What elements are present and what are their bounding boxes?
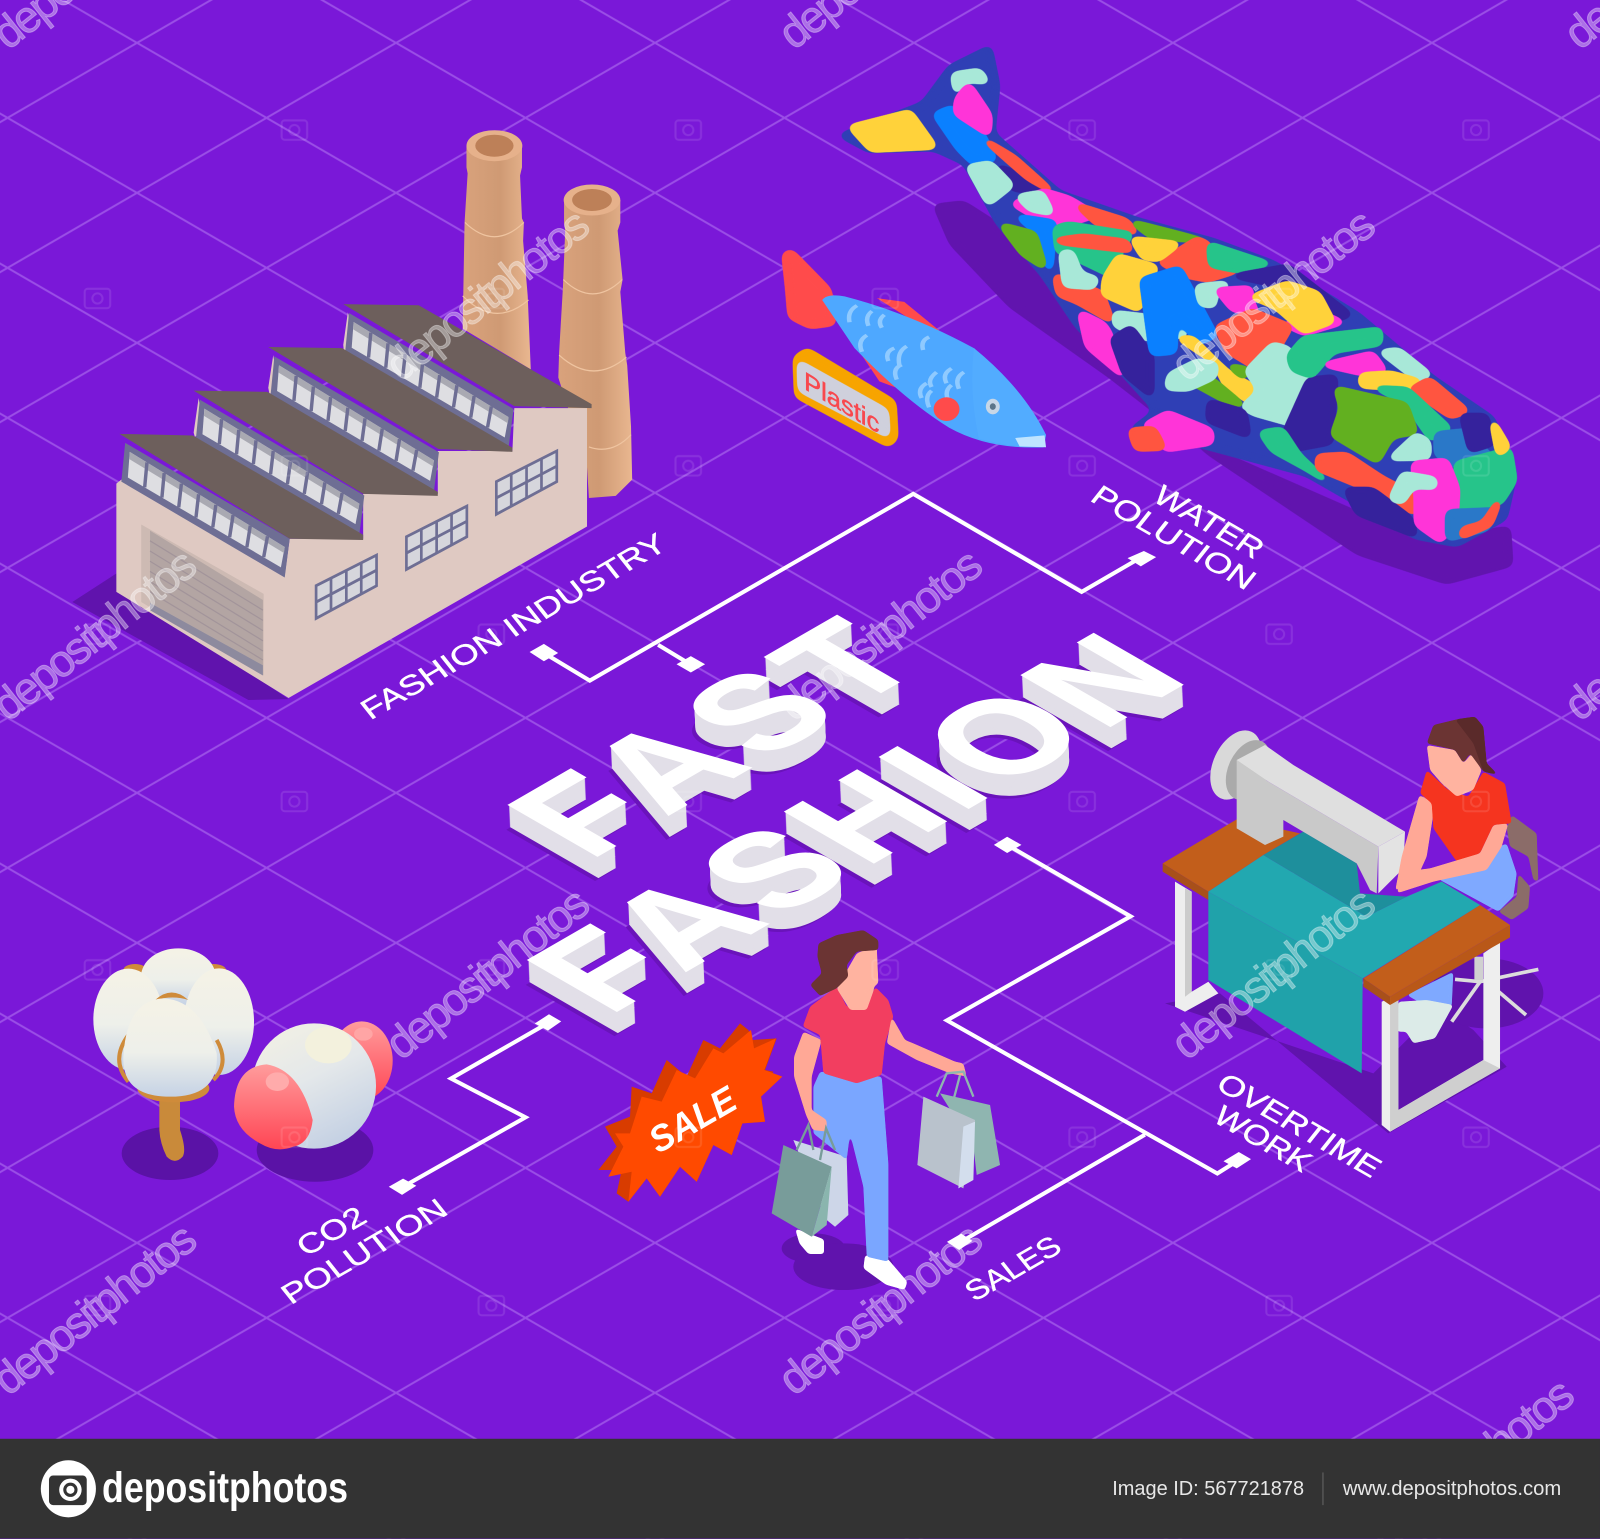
label: overtime work: OVERTIME (1210, 1067, 1388, 1184)
whale body (842, 48, 1514, 544)
whale shadow (932, 200, 1514, 585)
shoes (795, 1228, 907, 1290)
label: fashion industry: FASHION INDUSTRY (354, 527, 674, 726)
plastic label: Plastic (804, 366, 879, 439)
label: water polution: POLUTION (1084, 480, 1262, 596)
connector: overtime work and sales (947, 837, 1251, 1250)
table left leg (1175, 882, 1218, 1012)
whale made of clothes (842, 48, 1514, 585)
sticker face (608, 1030, 782, 1202)
jeans (813, 1072, 888, 1262)
fish body (822, 295, 1046, 448)
table top (1163, 819, 1510, 1005)
shopper hair (810, 930, 878, 996)
label: co2 polution: POLUTION (275, 1193, 454, 1311)
sign face (799, 361, 888, 437)
label: co2 polution: CO2 (290, 1201, 373, 1263)
table right leg (1382, 942, 1500, 1132)
factory illustration (72, 130, 632, 700)
sign frame (796, 350, 895, 445)
cotton stem (159, 1097, 184, 1161)
image id: Image ID: 567721878 (1112, 1478, 1304, 1500)
depositphotos watermarks: depositphotos (1161, 198, 1385, 390)
shirt (803, 987, 893, 1083)
seated woman head (1427, 717, 1498, 797)
seated woman pants (1433, 843, 1517, 912)
left arm (794, 1032, 827, 1132)
label: water polution: WATER (1147, 480, 1271, 565)
shopper figure (772, 930, 1000, 1290)
fish with plastic sign (781, 248, 1046, 448)
water molecule (234, 1021, 393, 1182)
sewing workstation (1163, 717, 1543, 1133)
back bag in left hand (793, 1140, 848, 1227)
roller door (141, 524, 264, 676)
chair shadow (1430, 958, 1543, 1028)
white atom (252, 1023, 376, 1149)
depositphotos watermarks: depositphotos (1161, 877, 1385, 1069)
chimney right (558, 184, 632, 498)
fish fins (862, 298, 954, 391)
right arm (887, 1017, 967, 1077)
factory shadow (72, 573, 289, 700)
side windows (316, 451, 557, 618)
front red atom (234, 1064, 313, 1149)
footer bar (0, 1439, 1600, 1539)
label: overtime work: WORK (1207, 1100, 1319, 1179)
connector: co2 polution (389, 1014, 561, 1195)
fish mouth (1015, 435, 1046, 447)
fabric (1208, 832, 1480, 1073)
connector: fashion industry to water polution (530, 494, 1156, 681)
website: www.depositphotos.com (1342, 1478, 1561, 1500)
word: fashion: FASHION (492, 609, 1224, 1032)
sticker extrusion (598, 1023, 777, 1202)
bags in right hand (917, 1072, 1000, 1188)
clothing patches (851, 71, 1514, 540)
depositphotos watermarks: depositphotos (375, 877, 599, 1069)
factory walls (116, 312, 587, 698)
seamstress legs (1397, 972, 1453, 1043)
fish eye (986, 399, 1000, 414)
footer logo icon (41, 1460, 96, 1517)
back red atom (331, 1021, 393, 1100)
seated woman torso (1395, 770, 1512, 893)
fish head (972, 348, 1046, 447)
front bag in left hand (772, 1125, 835, 1237)
label: sales: SALES (958, 1230, 1068, 1308)
shopper neck and face (837, 945, 878, 1010)
fish scales (849, 306, 964, 407)
word: fast: FAST (473, 594, 963, 877)
chair seat and back (1498, 815, 1538, 920)
depositphotos watermarks: depositphotos (768, 538, 992, 730)
depositphotos watermarks: depositphotos (768, 1212, 992, 1405)
fish tail (781, 248, 837, 330)
sawtooth roofs (119, 304, 592, 540)
depositphotos watermarks: depositphotos (375, 198, 599, 390)
chair base (1452, 957, 1538, 1022)
sewing machine (1200, 722, 1405, 893)
cotton lobes (93, 948, 254, 1075)
shopper shadow (782, 1233, 893, 1290)
roof windows (121, 313, 514, 578)
fish pectoral fin (934, 397, 959, 421)
sale sticker (598, 1023, 782, 1202)
footer logo text: depositphotos (102, 1464, 348, 1512)
cotton calyx (123, 964, 226, 1102)
table shadow (1165, 993, 1507, 1133)
sale text: SALE (642, 1078, 745, 1161)
molecule shadow (257, 1118, 373, 1182)
cotton boll (93, 948, 254, 1180)
chimney left (463, 130, 531, 369)
cotton shadow (122, 1127, 218, 1180)
